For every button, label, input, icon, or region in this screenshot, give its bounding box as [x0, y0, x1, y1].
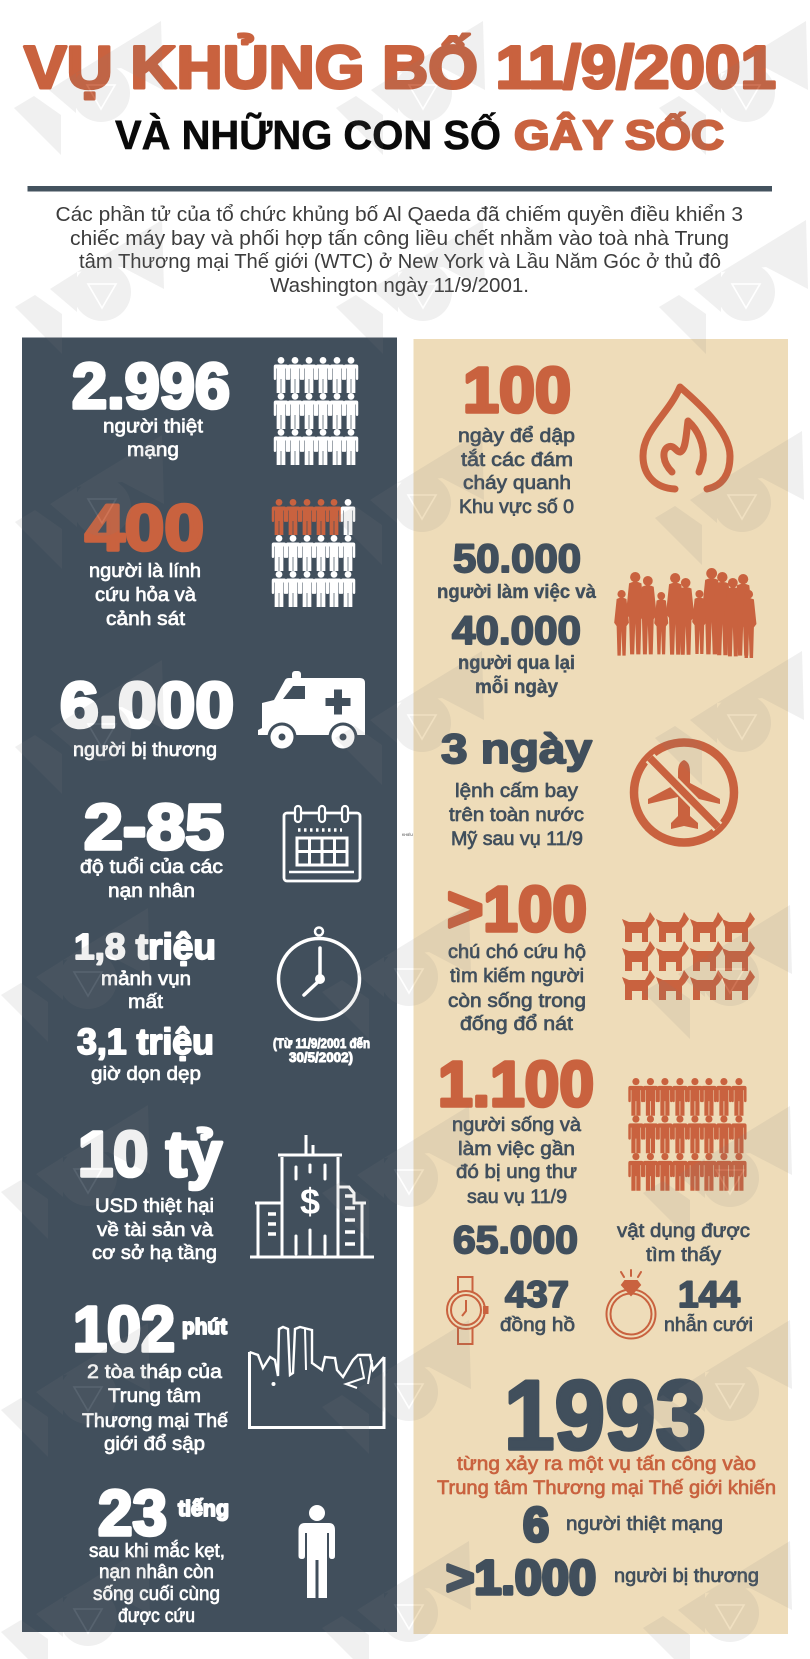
icon: people with orange highlights [272, 499, 355, 607]
title line 2: GÂY SỐC [514, 112, 724, 158]
stat: 23 tiếng: sống cuối cùng [93, 1583, 220, 1605]
icon: calendar [284, 806, 360, 881]
stat: 400: người là lính [89, 560, 201, 582]
stat: 50.000 and 40.000 people [437, 537, 596, 698]
stat: >100: đống đổ nát [460, 1013, 574, 1035]
clock note: 30/5/2002) [289, 1049, 353, 1065]
stat: >100: còn sống trong [448, 990, 586, 1012]
stat: 2-85: độ tuổi của các [80, 856, 223, 878]
stat: 23 tiếng: được cứu [118, 1605, 195, 1627]
stat: >1.000 injured [446, 1552, 759, 1605]
stat: 102 phút: Trung tâm [108, 1385, 201, 1407]
intro paragraph: chiếc máy bay và phối hợp tấn công liều chết nhằm vào toà nhà Trung [70, 227, 729, 250]
icon: damaged buildings with dollar sign [250, 1135, 374, 1257]
icon: crowd silhouette [614, 568, 756, 658]
icon: clock [278, 928, 360, 1020]
stat: 144 rings: nhẫn cưới [664, 1313, 753, 1336]
stat: 6.000: người bị thương [73, 739, 217, 761]
stat: 400: cảnh sát [106, 608, 186, 630]
stat: 2-85: nạn nhân [108, 880, 195, 902]
icon: ambulance [258, 671, 365, 752]
icon: watch [447, 1277, 488, 1344]
stat: 400 [85, 491, 204, 630]
stat: debris and clean-up hours: giờ dọn dẹp [91, 1063, 201, 1085]
stat: 437 watches: 437 [505, 1274, 569, 1315]
title line 2 [115, 112, 724, 158]
stat: 2-85 [80, 791, 224, 902]
tiny stray label between panels: KHIẾU [402, 832, 413, 837]
stat: debris and clean-up hours: 1,8 triệu [74, 926, 216, 967]
stat: >1.000 injured: người bị thương [614, 1565, 759, 1587]
title [24, 34, 776, 158]
clock note [273, 1035, 370, 1065]
stat: 3 ngày: lệnh cấm bay [455, 780, 578, 802]
stat: 6 deaths: người thiệt mạng [566, 1513, 723, 1535]
stat: 1993 [437, 1360, 776, 1499]
icon: collapsing towers [250, 1327, 384, 1428]
stat: 10 tỷ: 10 tỷ [78, 1118, 222, 1190]
stat: 1.100: sau vụ 11/9 [467, 1186, 567, 1208]
stat: >100 [447, 873, 587, 1035]
intro paragraph [56, 204, 743, 297]
stat: 100: 100 [463, 354, 571, 426]
stat: debris and clean-up hours: 3,1 triệu [77, 1021, 214, 1062]
stat: 400: cứu hỏa và [95, 584, 196, 606]
stat: 10 tỷ [78, 1118, 222, 1264]
icon: damaged buildings with dollar sign: $ [300, 1181, 320, 1222]
stat: 2.996 [72, 350, 230, 461]
stat: >1.000 injured: >1.000 [446, 1552, 596, 1605]
stat: 65.000 items: vật dụng được [617, 1220, 750, 1242]
stat: 102 phút: Thương mại Thế [82, 1410, 228, 1432]
stat: 144 rings: 144 [678, 1274, 740, 1315]
intro paragraph: Washington ngày 11/9/2001. [270, 275, 529, 297]
stat: 100: tắt các đám [461, 448, 573, 471]
stat: 1.100: làm việc gần [458, 1138, 575, 1160]
stat: 3 ngày [441, 725, 593, 850]
stat: 23 tiếng: sau khi mắc kẹt, [89, 1539, 225, 1562]
stat: 400: 400 [85, 491, 204, 564]
stat: 10 tỷ: về tài sản và [97, 1219, 213, 1241]
icon: 24 orange people [628, 1078, 747, 1191]
stat: 23 tiếng: nạn nhân còn [99, 1561, 214, 1583]
stat: 100: Khu vực số 0 [459, 496, 574, 518]
stat: 2.996: 2.996 [72, 350, 230, 422]
title line 1: VỤ KHỦNG BỐ 11/9/2001 [24, 34, 776, 101]
icon: flame [643, 387, 730, 489]
stat: 23 tiếng: 23 [98, 1477, 167, 1549]
stat: 100: ngày để dập [458, 425, 575, 447]
stat: 102 phút: phút [182, 1314, 228, 1339]
icon: wedding ring [606, 1270, 656, 1338]
stat: 23 tiếng [89, 1477, 229, 1627]
stat: 10 tỷ: USD thiệt hại [95, 1195, 214, 1217]
stat: 50.000 and 40.000 people: người làm việc và [437, 581, 596, 603]
stat: 102 phút: giới đổ sập [104, 1433, 205, 1455]
stat: 100 [458, 354, 575, 518]
stat: 2.996: người thiệt [103, 416, 204, 438]
stat: debris and clean-up hours: mất [128, 991, 164, 1013]
stat: 50.000 and 40.000 people: mỗi ngày [475, 674, 558, 698]
icon: single person [298, 1505, 335, 1598]
stat: 50.000 and 40.000 people: 40.000 [452, 609, 581, 653]
stat: 65.000 items: 65.000 [453, 1219, 578, 1262]
stat: 6 deaths: 6 [523, 1499, 549, 1552]
stat: 102 phút [73, 1293, 228, 1455]
intro paragraph: Các phần tử của tổ chức khủng bố Al Qaeda đã chiếm quyền điều khiển 3 [56, 204, 743, 226]
stat: 1993: Trung tâm Thương mại Thế giới khiến [437, 1477, 776, 1499]
stat: 10 tỷ: cơ sở hạ tầng [92, 1242, 217, 1264]
stat: 1.100: đó bị ung thư [456, 1161, 577, 1183]
title line 2: VÀ NHỮNG CON SỐ [115, 112, 501, 158]
stat: 437 watches: đồng hồ [500, 1314, 575, 1336]
stat: 50.000 and 40.000 people: người qua lại [458, 652, 575, 674]
stat: 1993: 1993 [504, 1360, 706, 1470]
panel: right beige column [414, 339, 788, 1634]
stat: 6 deaths [523, 1499, 723, 1552]
stat: 437 watches [500, 1274, 575, 1336]
intro paragraph: tâm Thương mại Thế giới (WTC) ở New York và Lầu Năm Góc ở thủ đô [79, 251, 721, 273]
stat: 6.000: 6.000 [60, 669, 234, 741]
stat: 102 phút: 102 [73, 1293, 175, 1365]
stat: 50.000 and 40.000 people: 50.000 [453, 537, 581, 581]
stat: >100: >100 [447, 873, 587, 945]
stat: 102 phút: 2 tòa tháp của [87, 1361, 222, 1383]
stat: 3 ngày: trên toàn nước [449, 804, 584, 826]
stat: debris and clean-up hours [74, 926, 216, 1085]
stat: 1993: từng xảy ra một vụ tấn công vào [457, 1453, 756, 1475]
clock note: (Từ 11/9/2001 đến [273, 1035, 370, 1051]
stat: 65.000 items: tìm thấy [646, 1244, 721, 1266]
stat: 3 ngày: 3 ngày [441, 725, 593, 772]
stat: 1.100: 1.100 [438, 1048, 594, 1120]
stat: 65.000 items [453, 1219, 750, 1266]
icon: rescue dogs [622, 912, 755, 1000]
stat: 23 tiếng: tiếng [178, 1496, 229, 1521]
stat: 1.100 [438, 1048, 594, 1208]
stat: 1.100: người sống và [452, 1114, 581, 1136]
panel: left dark column [22, 338, 397, 1632]
stat: >100: tìm kiếm người [450, 965, 584, 987]
stat: debris and clean-up hours: mảnh vụn [101, 968, 191, 990]
stat: 3 ngày: Mỹ sau vụ 11/9 [451, 828, 583, 850]
stat: 2.996: mạng [127, 439, 179, 461]
stat: >100: chú chó cứu hộ [448, 941, 586, 963]
stat: 2-85: 2-85 [84, 791, 224, 863]
stat: 100: cháy quanh [463, 472, 571, 494]
icon: no-fly plane [634, 742, 734, 842]
icon: 18 people [274, 357, 358, 465]
stat: 144 rings [664, 1274, 753, 1336]
